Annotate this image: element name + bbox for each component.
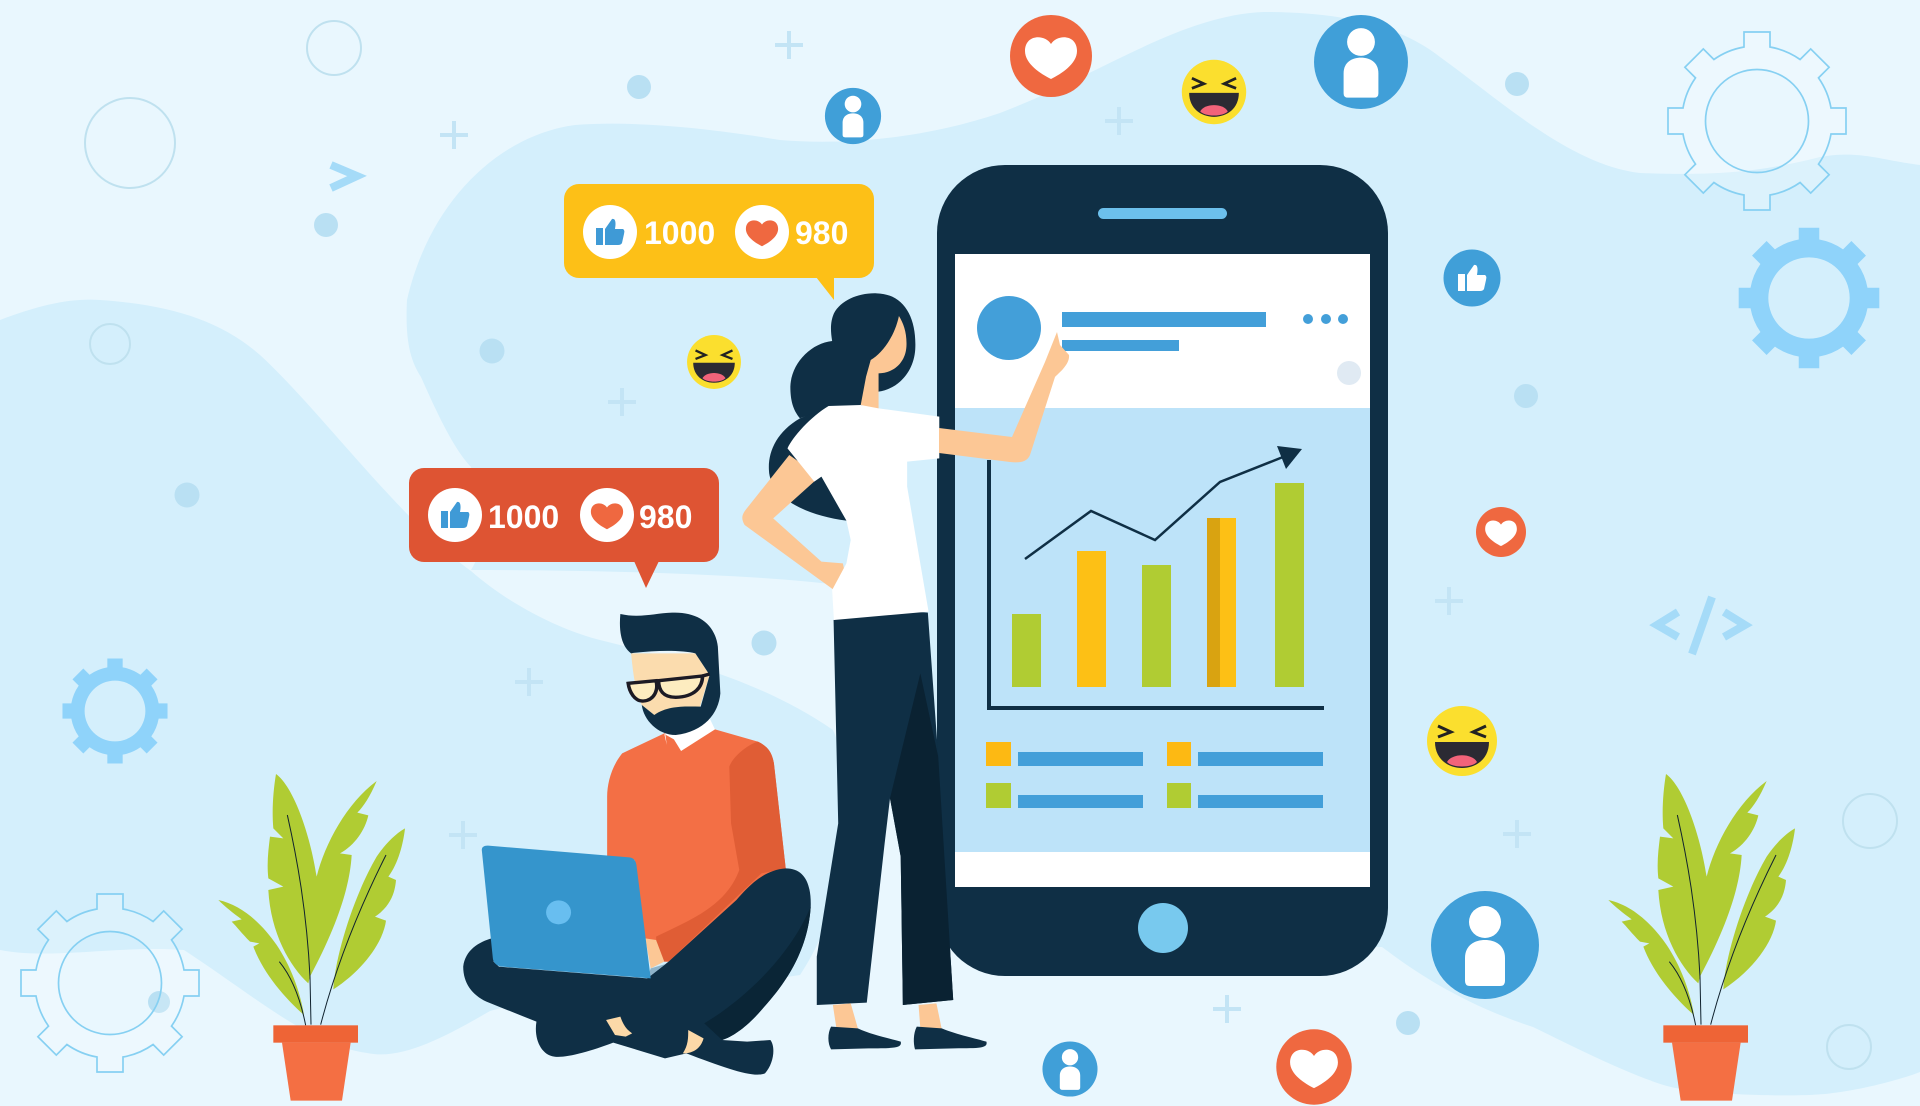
plant left	[218, 774, 405, 1101]
veins	[279, 815, 386, 1025]
veins	[1669, 815, 1776, 1025]
callout: yellow likes bubble: 980	[795, 215, 848, 251]
icon: person bottom small	[1042, 1041, 1098, 1097]
man hair and beard	[620, 613, 720, 735]
bar chart	[1012, 483, 1304, 687]
icon: person top large	[1314, 15, 1408, 109]
laptop keyboard edge	[647, 964, 666, 978]
man sleeve shading	[656, 742, 786, 962]
man sweater	[607, 729, 786, 962]
laptop	[482, 846, 651, 978]
callout: yellow likes bubble: 1000	[644, 215, 715, 251]
woman face and neck	[861, 316, 907, 410]
callout: red likes bubble: 980	[639, 499, 692, 535]
trend line arrow	[1025, 446, 1302, 559]
laptop logo	[546, 900, 571, 924]
icon: laughing emoji middle	[687, 335, 741, 389]
profile name bar	[1062, 312, 1266, 327]
pot	[273, 1025, 358, 1101]
icon: filled gear right	[1739, 228, 1879, 368]
leaves	[1608, 774, 1795, 1015]
woman left arm	[742, 455, 846, 590]
phone	[937, 165, 1388, 976]
plant right	[1608, 774, 1795, 1101]
icon: heart top	[1010, 15, 1092, 97]
icon: filled gear left	[62, 658, 168, 764]
man with laptop	[463, 613, 811, 1075]
leaves	[218, 774, 405, 1015]
icon: code chevron left	[331, 165, 357, 188]
icon: thumbs up badge	[1444, 250, 1500, 306]
icon: person right large	[1431, 891, 1539, 999]
man glasses	[628, 674, 710, 701]
menu dots	[1303, 314, 1348, 324]
pot	[1663, 1025, 1748, 1101]
man legs	[463, 868, 811, 1075]
callout: red likes bubble: 1000	[488, 499, 559, 535]
chart panel	[955, 408, 1370, 852]
callout: yellow likes bubble	[564, 184, 874, 300]
icon: person top small	[825, 88, 881, 144]
phone body	[937, 165, 1388, 976]
icon: outline gear top right	[1668, 32, 1846, 210]
man hand	[645, 938, 664, 968]
man face	[631, 653, 710, 715]
icon: heart bottom	[1276, 1029, 1352, 1105]
woman pointing at phone	[742, 293, 1069, 1049]
callout: red likes bubble	[409, 468, 719, 588]
legend	[986, 742, 1323, 808]
icon: laughing emoji right	[1427, 706, 1497, 776]
woman trousers	[817, 611, 987, 1049]
woman raised arm	[939, 332, 1069, 462]
decorative dots	[148, 72, 1538, 1035]
home button	[1138, 903, 1188, 953]
man ankles	[606, 1017, 704, 1053]
chart axes	[989, 460, 1324, 708]
man knee shading	[704, 907, 811, 1040]
woman shirt	[787, 405, 939, 620]
icon: outline gear bottom left	[21, 894, 199, 1072]
icon: code tag	[1657, 597, 1745, 654]
profile subtitle bar	[1062, 340, 1179, 351]
woman hair	[769, 293, 915, 521]
decorative plus signs	[440, 31, 1531, 1023]
icon: laughing emoji top	[1182, 60, 1246, 124]
man collar	[664, 718, 715, 751]
phone speaker	[1098, 208, 1227, 219]
phone screen	[955, 254, 1370, 887]
pale dot	[1337, 361, 1361, 385]
profile avatar	[977, 296, 1041, 360]
icon: heart small right	[1476, 507, 1526, 557]
